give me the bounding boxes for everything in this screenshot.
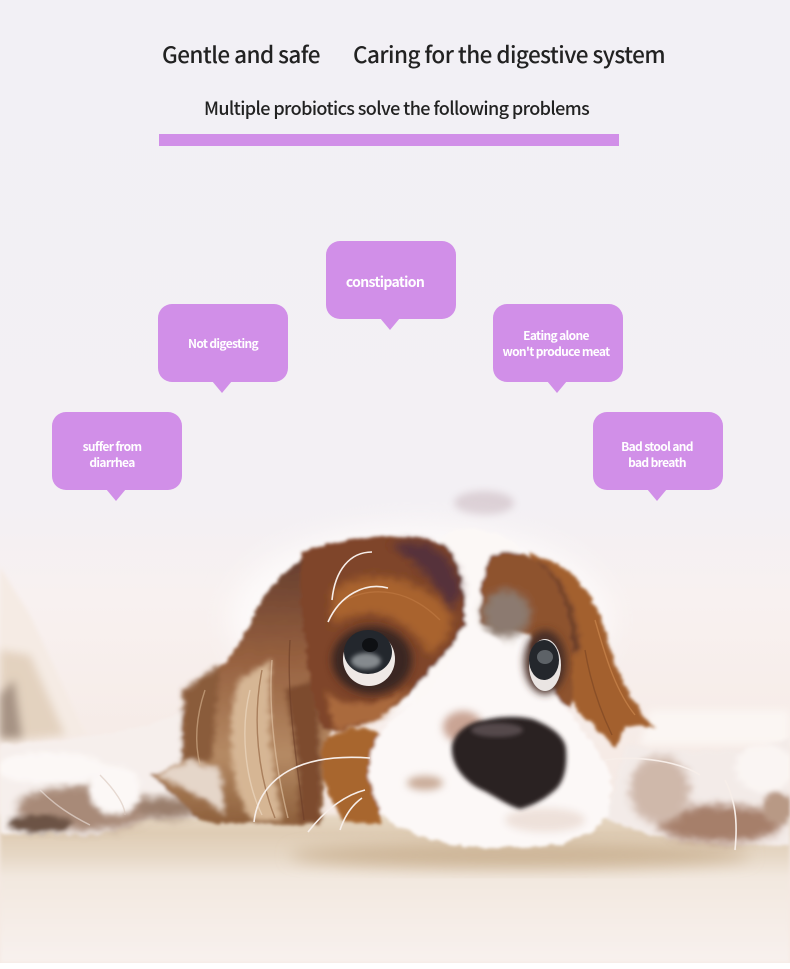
blurry background object bbox=[454, 491, 514, 515]
speech bubble: diarrhea: diarrhea bbox=[89, 454, 135, 471]
speech bubble: eating alone: won't produce meat bbox=[502, 343, 610, 360]
white head fur halo bbox=[230, 525, 610, 715]
speech bubble: diarrhea: suffer from bbox=[83, 438, 141, 455]
right ear bbox=[530, 554, 656, 748]
whiskers bbox=[254, 552, 736, 850]
speech bubble: eating alone: Eating alone bbox=[523, 327, 589, 344]
dog body and head bbox=[0, 530, 790, 847]
carpet shadow under dog bbox=[290, 842, 750, 868]
white muzzle bbox=[369, 617, 611, 847]
title: Caring for the digestive system bbox=[353, 38, 665, 70]
left ear bbox=[151, 545, 340, 825]
left eye bbox=[332, 626, 412, 694]
title: Gentle and safe bbox=[162, 38, 320, 70]
blurred skirting bbox=[640, 710, 790, 745]
speech bubble: bad breath: Bad stool and bbox=[621, 438, 693, 455]
purple divider bar bbox=[159, 134, 619, 146]
muzzle freckles bbox=[407, 711, 585, 832]
right eye bbox=[524, 630, 566, 694]
speech bubble: constipation: constipation bbox=[346, 272, 424, 292]
left brown face patch bbox=[300, 537, 465, 732]
nose bbox=[452, 717, 566, 809]
speech bubble: bad breath bbox=[593, 412, 723, 501]
left paw bbox=[0, 712, 205, 835]
bottom strip bbox=[0, 963, 790, 969]
speech bubble: bad breath: bad breath bbox=[628, 454, 686, 471]
speech bubble: constipation bbox=[326, 241, 456, 330]
speech bubble: diarrhea bbox=[52, 412, 182, 501]
subtitle: Multiple probiotics solve the following problems bbox=[204, 95, 589, 121]
carpet bbox=[0, 815, 790, 963]
title bbox=[162, 38, 665, 70]
white forehead bbox=[400, 530, 530, 780]
fur strands bbox=[40, 592, 635, 825]
right brown face patch bbox=[480, 552, 573, 708]
speech bubble: not digesting bbox=[158, 304, 288, 393]
speech bubble: eating alone bbox=[493, 304, 623, 393]
paw under chin bbox=[322, 728, 382, 825]
speech bubble: not digesting: Not digesting bbox=[188, 335, 258, 352]
right paw bbox=[606, 735, 790, 846]
blurred object at left bbox=[0, 567, 86, 745]
